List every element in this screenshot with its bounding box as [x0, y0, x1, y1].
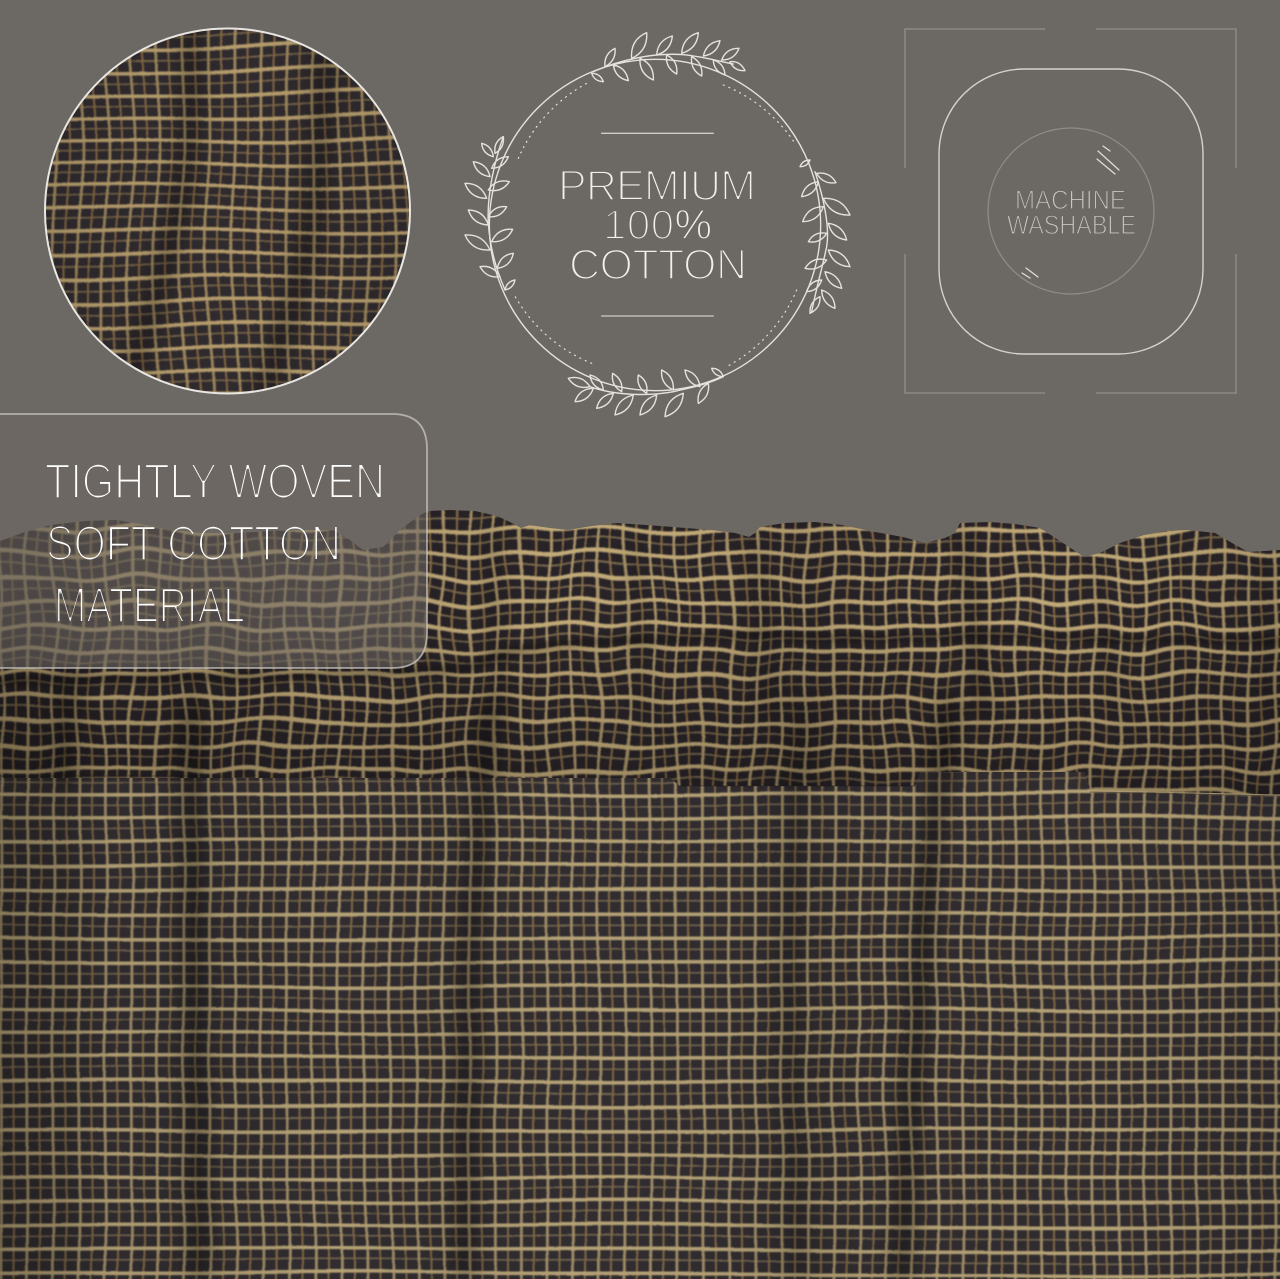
inner circle with glints: [988, 128, 1154, 294]
rounded square outline: [939, 69, 1203, 354]
curtain photo: plaid fabric: [0, 470, 1280, 1279]
corner brackets: [905, 29, 1236, 393]
badge text: 100%: [603, 201, 712, 248]
callout text: SOFT COTTON: [46, 517, 341, 571]
callout text: TIGHTLY WOVEN: [45, 455, 385, 509]
badge text: PREMIUM: [558, 162, 756, 210]
callout panel: translucent box: [0, 414, 427, 668]
machine washable text: [1007, 185, 1136, 240]
badge: machine washable: [905, 29, 1236, 393]
machine washable text: MACHINE: [1015, 185, 1126, 215]
badge text: [558, 162, 756, 289]
badge text: COTTON: [569, 241, 747, 289]
callout text: [45, 455, 385, 633]
swatch: fabric close-up circle: [44, 28, 411, 394]
machine washable text: WASHABLE: [1007, 210, 1136, 240]
badge: premium 100% cotton wreath: [465, 33, 850, 417]
wreath ring and leaves: [465, 33, 850, 417]
callout text: MATERIAL: [54, 579, 245, 633]
